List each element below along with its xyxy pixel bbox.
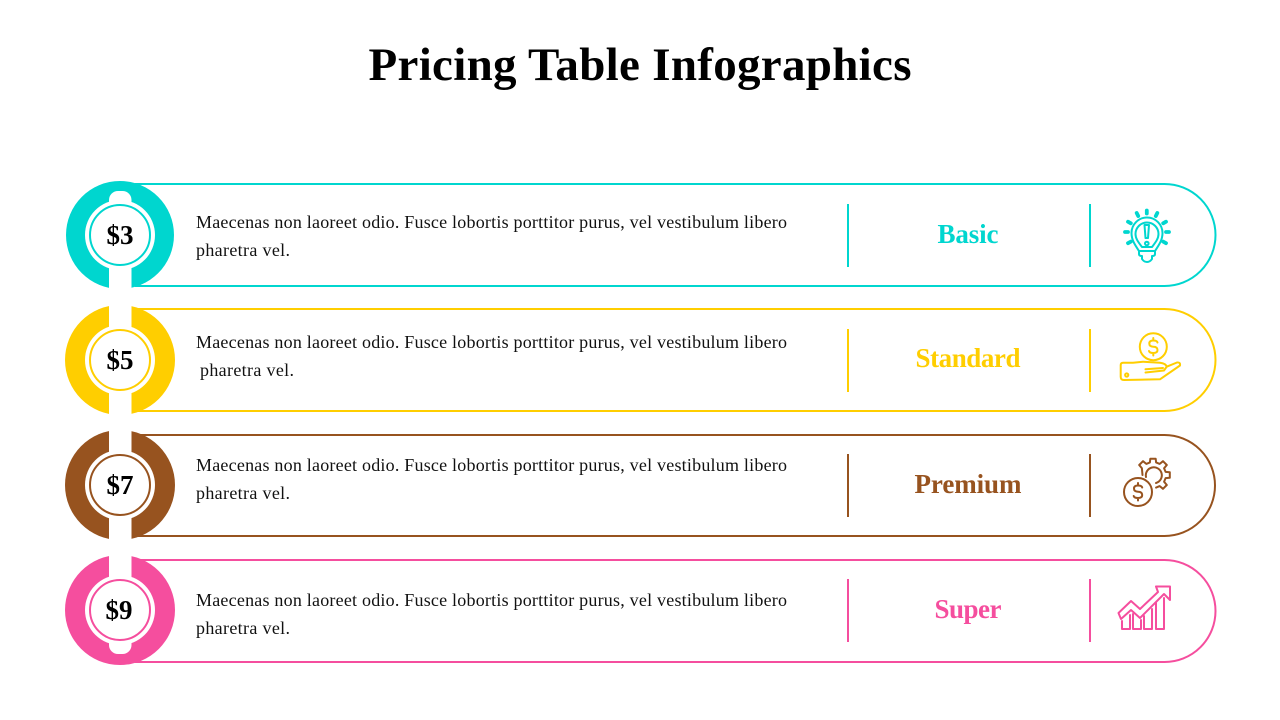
plan name: Premium [914, 469, 1022, 499]
price badge: $7 [106, 470, 134, 500]
panel: premium row [65, 425, 1215, 545]
panel: basic row [66, 181, 1216, 295]
panel: standard row [65, 300, 1216, 420]
description [196, 455, 787, 503]
plan name: Standard [916, 343, 1020, 373]
price badge [90, 580, 150, 640]
icon: growth chart [1118, 586, 1170, 629]
price badge [90, 330, 150, 390]
price badge: $5 [106, 345, 134, 375]
description: pharetra vel. [196, 618, 290, 638]
row outline [135, 560, 1216, 662]
icon: hand holding coin [1121, 333, 1180, 380]
panel: super row [65, 550, 1216, 665]
dividers [848, 454, 1090, 517]
description [196, 590, 787, 638]
description: pharetra vel. [196, 240, 290, 260]
description [196, 212, 787, 260]
description: Maecenas non laoreet odio. Fusce lobortis porttitor purus, vel vestibulum libero [196, 590, 787, 610]
plan name: Basic [938, 219, 999, 249]
price ring [65, 550, 175, 665]
description: Maecenas non laoreet odio. Fusce lobortis porttitor purus, vel vestibulum libero [196, 332, 787, 352]
price badge: $3 [106, 220, 134, 250]
price ring [65, 425, 175, 545]
price badge: $9 [106, 595, 132, 625]
price ring [66, 181, 174, 295]
description: pharetra vel. [196, 483, 290, 503]
dividers [848, 204, 1090, 267]
description [196, 332, 787, 380]
plan name: Super [934, 594, 1002, 624]
price badge [90, 205, 150, 265]
description: pharetra vel. [200, 360, 294, 380]
description: Maecenas non laoreet odio. Fusce lobortis porttitor purus, vel vestibulum libero [196, 455, 787, 475]
row outline [135, 184, 1216, 286]
row outline [135, 309, 1216, 411]
icon: gear and coin [1124, 459, 1170, 506]
icon: light bulb [1125, 210, 1169, 262]
description: Maecenas non laoreet odio. Fusce lobortis porttitor purus, vel vestibulum libero [196, 212, 787, 232]
title: Pricing Table Infographics [368, 39, 912, 91]
row outline [135, 435, 1215, 536]
dividers [848, 329, 1090, 392]
dividers [848, 579, 1090, 642]
price ring [65, 300, 175, 420]
price badge [90, 455, 150, 515]
